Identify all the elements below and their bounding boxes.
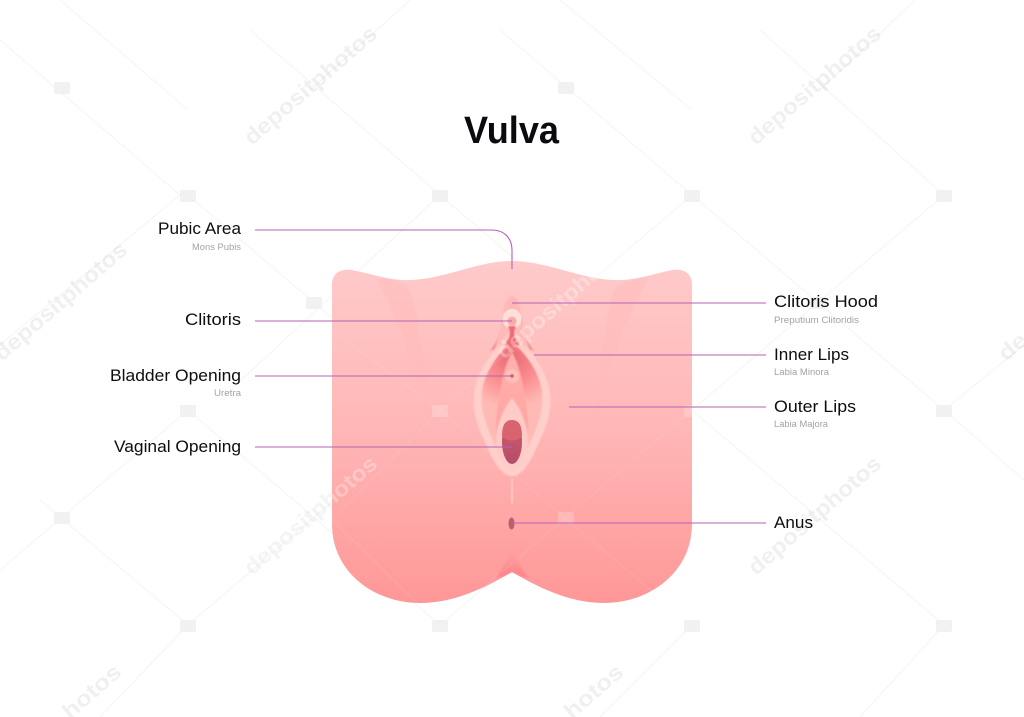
title: Vulva (464, 110, 560, 152)
watermark overlay: depositphotos (239, 451, 382, 580)
label: pubic area: Pubic Area (158, 219, 242, 238)
thigh crease left (376, 278, 432, 440)
frenulum (504, 326, 520, 346)
line: outer lips (569, 406, 766, 408)
label: clitoris hood (774, 292, 878, 325)
line: clitoris hood (512, 302, 766, 304)
label: inner lips: Labia Minora (774, 367, 829, 377)
label: outer lips: Labia Majora (774, 419, 828, 429)
perineal line (510, 478, 514, 504)
label: bladder opening (110, 366, 241, 398)
line: anus (512, 522, 766, 524)
urethra (505, 369, 519, 383)
gluteal cleft (496, 544, 528, 578)
watermark overlay: depositphotos (491, 235, 634, 364)
outer glow (474, 330, 550, 476)
watermark overlay (239, 195, 700, 625)
clitoris hood (503, 295, 521, 314)
label: clitoris hood: Clitoris Hood (774, 292, 878, 311)
leader lines (255, 230, 766, 523)
line: clitoris (255, 320, 512, 322)
watermark: depositphotos (239, 451, 382, 580)
vaginal opening (502, 420, 522, 464)
label: pubic area: Mons Pubis (192, 242, 242, 252)
vestibule (496, 352, 528, 466)
vaginal opening highlight (502, 420, 522, 440)
clitoris ring (502, 309, 522, 329)
hood folds (490, 316, 534, 351)
label: clitoris: Clitoris (185, 310, 241, 329)
clitoris (508, 316, 516, 326)
label: inner lips (774, 345, 849, 377)
label: bladder opening: Bladder Opening (110, 366, 241, 385)
opening surround (496, 398, 528, 472)
label: bladder opening: Uretra (214, 388, 241, 398)
label: pubic area (158, 219, 242, 252)
label: vaginal opening: Vaginal Opening (114, 437, 241, 456)
label: anus: Anus (774, 513, 813, 532)
line: inner lips (534, 354, 766, 356)
label: clitoris hood: Preputium Clitoridis (774, 315, 860, 325)
body illustration (332, 261, 692, 603)
line: pubic area (255, 230, 512, 269)
thigh crease right (592, 278, 648, 440)
line: vaginal opening (255, 446, 512, 448)
body silhouette (332, 261, 692, 603)
watermark: depositphotos (743, 21, 886, 150)
inner lips (482, 342, 542, 464)
anus (508, 518, 514, 530)
label: outer lips (774, 397, 856, 429)
watermark: depositphotos (743, 451, 886, 580)
label: outer lips: Outer Lips (774, 397, 856, 416)
line: bladder opening (255, 375, 512, 377)
label: inner lips: Inner Lips (774, 345, 849, 364)
watermark: depositphotos (239, 21, 382, 150)
